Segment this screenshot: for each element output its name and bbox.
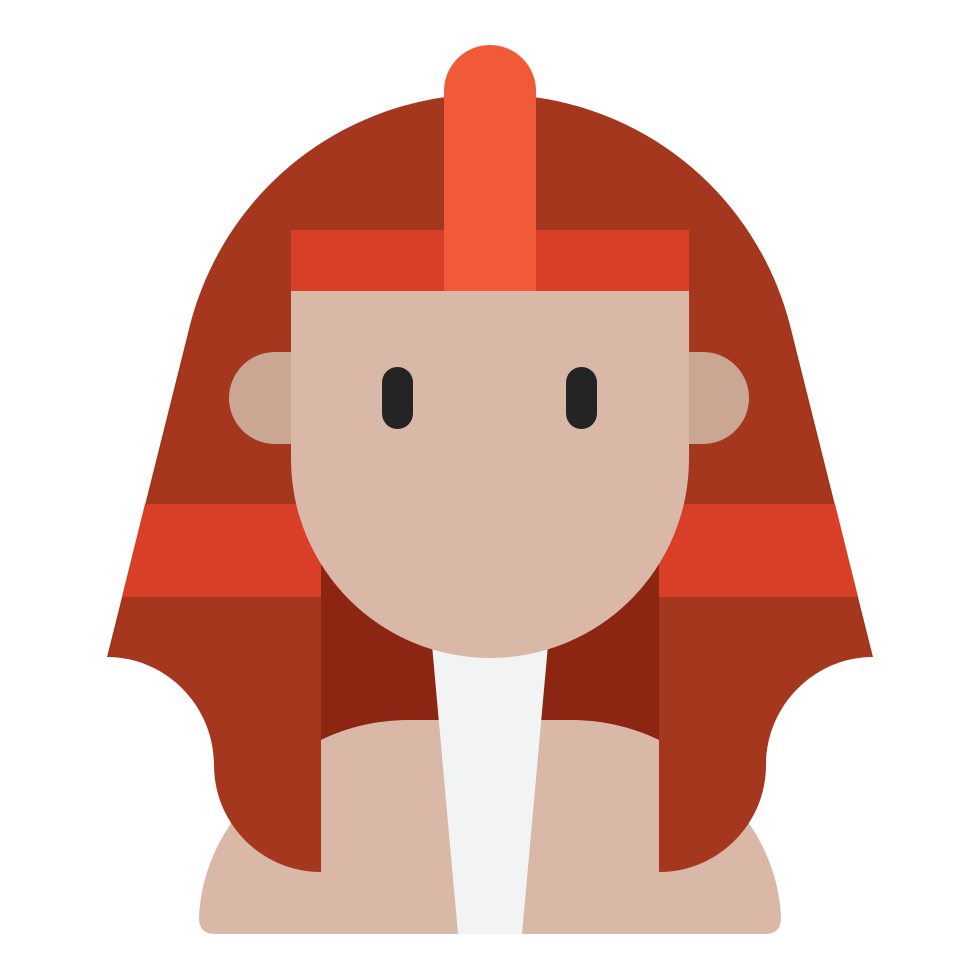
uraeus crest <box>444 45 536 291</box>
right eye <box>566 367 597 429</box>
face <box>291 291 689 658</box>
right headdress stripe <box>659 504 858 597</box>
shoulders and body <box>199 720 781 934</box>
headband <box>291 230 689 291</box>
headdress back shadow <box>321 560 659 740</box>
left eye <box>382 367 413 429</box>
right ear <box>689 352 749 444</box>
left headdress stripe <box>122 504 321 597</box>
left ear <box>229 352 291 444</box>
headdress <box>107 94 873 872</box>
white collar panel <box>432 645 548 934</box>
